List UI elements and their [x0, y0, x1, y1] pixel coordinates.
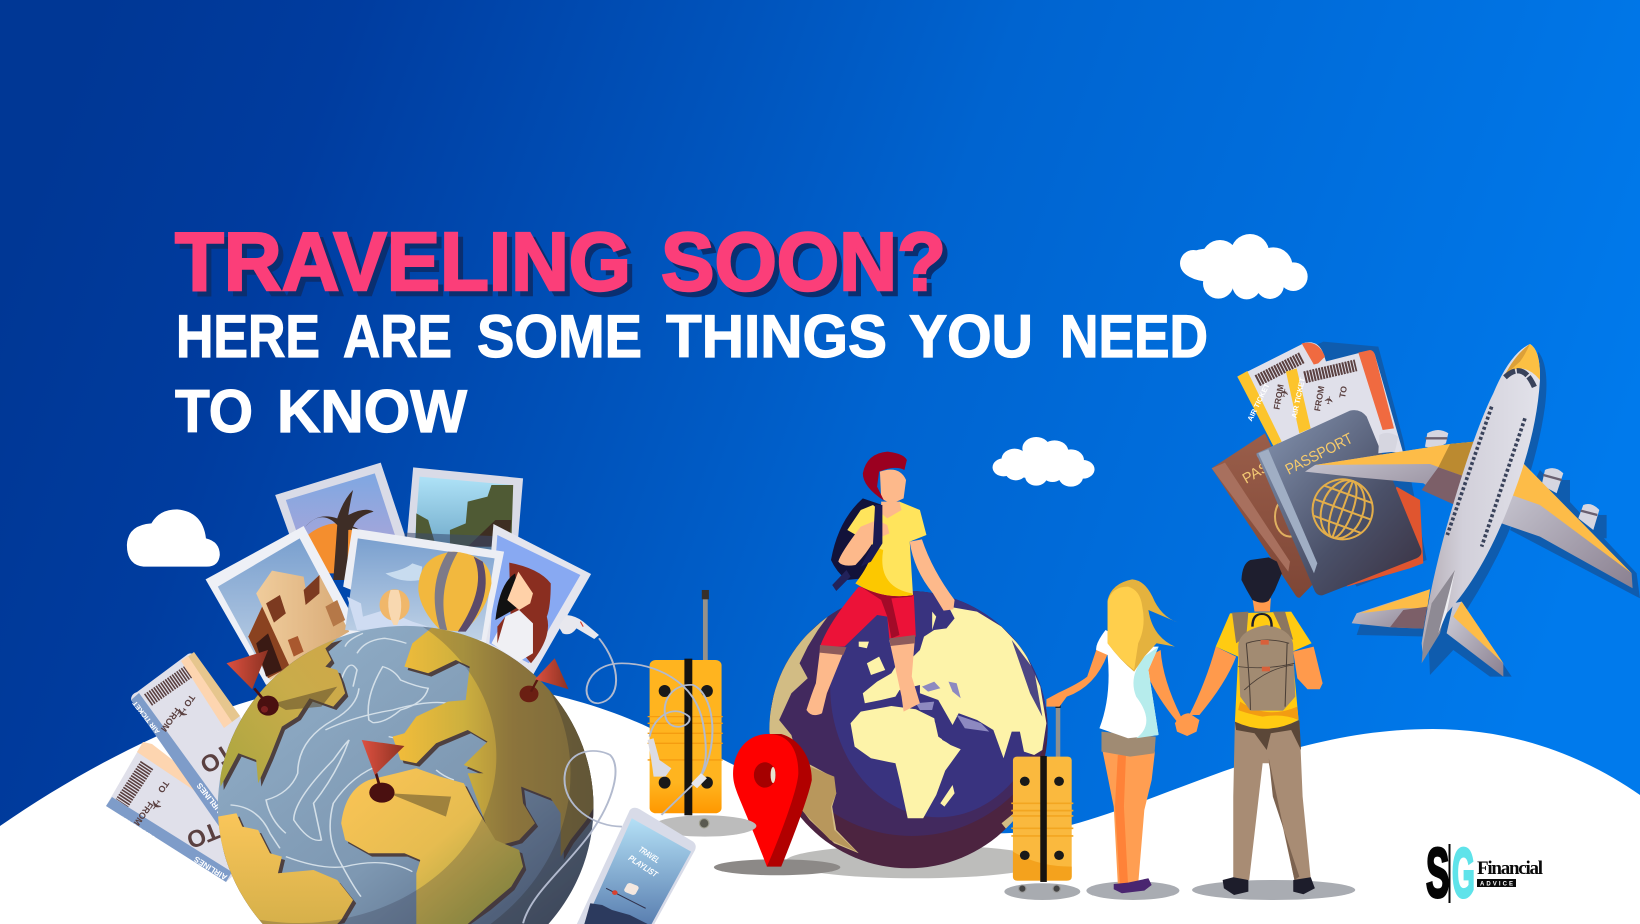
map flags	[227, 650, 569, 817]
continent: east	[393, 627, 593, 857]
ticket lower: TO	[182, 816, 223, 854]
ticket: right	[1286, 350, 1403, 453]
title: traveling soon: TRAVELING	[175, 215, 631, 308]
earphones and cable	[523, 615, 712, 923]
illustration: passports and tickets	[1212, 342, 1427, 598]
continent: south west	[218, 813, 353, 924]
logo letter G: G	[1452, 834, 1475, 913]
engines	[1378, 430, 1599, 530]
logo tag: ADVICE	[1480, 882, 1513, 888]
ocean currents	[230, 633, 454, 897]
ticket upper: TO	[182, 693, 197, 709]
continent: centre	[341, 768, 523, 924]
ticket shadows	[1247, 342, 1427, 587]
ticket: left: FROM	[1271, 383, 1286, 410]
ticket lower: ✈	[146, 795, 166, 814]
photo: building	[206, 526, 361, 685]
flag east	[520, 658, 569, 702]
man with backpack	[1175, 557, 1355, 900]
ticket upper: FROM	[159, 706, 182, 733]
subtitle: KNOW	[277, 378, 467, 445]
photo: forest	[404, 467, 523, 550]
ticket: left: AIR TICKET	[1245, 381, 1272, 423]
tan land on the left	[768, 613, 859, 853]
boarding tickets	[106, 652, 300, 882]
subtitle: SOME	[477, 303, 642, 370]
smartphone: TRAVEL	[636, 845, 663, 865]
photo: balloons	[343, 528, 504, 643]
subtitle: NEED	[1060, 303, 1208, 370]
continent: north west	[220, 637, 345, 787]
ticket: left	[1237, 342, 1350, 447]
illustration: photos, tickets and globe	[100, 463, 712, 924]
ticket upper	[131, 652, 300, 850]
logo: SG Financial Advice	[1426, 834, 1543, 913]
title: traveling soon: TRAVELING	[180, 220, 636, 313]
subtitle: ARE	[343, 303, 452, 370]
subtitle: TO	[175, 378, 253, 445]
flag west	[227, 650, 337, 716]
cloud middle	[993, 437, 1095, 487]
ticket upper: AIR TICKET	[132, 699, 162, 735]
photo: palm	[275, 463, 406, 580]
smartphone	[577, 808, 696, 924]
right tail	[1447, 602, 1503, 677]
plane shadow	[1357, 352, 1640, 677]
title: traveling soon: SOON?	[666, 220, 951, 313]
woman	[1046, 579, 1181, 900]
passport: blue	[1257, 410, 1421, 595]
globe shading	[259, 626, 594, 924]
photo: woman	[484, 524, 591, 675]
suitcase large	[648, 590, 756, 837]
ticket: right: AIR TICKET	[1290, 376, 1307, 419]
globe	[769, 591, 1048, 868]
ground shadow: globe	[785, 845, 1046, 878]
passport: brown	[1212, 433, 1330, 598]
title: traveling soon	[175, 215, 951, 313]
subtitle: THINGS	[666, 303, 887, 370]
ticket upper: TO	[195, 738, 237, 779]
logo wordmark: Financial	[1477, 858, 1543, 879]
subtitle	[175, 303, 1208, 445]
ticket: right: TO	[1337, 385, 1349, 399]
left wing	[1305, 442, 1475, 507]
ticket lower: AIR TICKET	[118, 814, 156, 841]
logo letter S: S	[1426, 834, 1449, 912]
location pin	[733, 734, 812, 867]
inland water	[916, 682, 989, 732]
continent: asia and europe	[863, 607, 1046, 758]
traveller boy	[806, 452, 955, 715]
ticket lower	[106, 742, 285, 882]
fuselage	[1422, 344, 1540, 663]
land shadows	[221, 631, 597, 924]
right wing	[1497, 458, 1633, 588]
title: traveling soon: SOON?	[661, 215, 946, 308]
ticket: left: ✈	[1279, 387, 1292, 399]
ticket lower: AIRLINES	[192, 854, 229, 882]
cloud top right	[1180, 234, 1308, 299]
passport: blue: PASSPORT	[1283, 430, 1356, 479]
small islands	[859, 612, 955, 807]
subtitle: HERE	[176, 303, 320, 370]
subtitle: YOU	[909, 303, 1033, 370]
left globe	[218, 626, 594, 924]
left tail	[1352, 589, 1430, 629]
ticket: right: ✈	[1323, 395, 1337, 406]
ticket upper: AIRLINES	[195, 781, 225, 816]
illustration: globe with traveller	[714, 452, 1355, 900]
passport: brown: PAS	[1240, 459, 1273, 487]
ground shadow: pin	[714, 859, 840, 875]
cloud left	[127, 509, 220, 567]
ticket upper: ✈	[172, 703, 192, 722]
white hill	[0, 678, 1640, 924]
suitcase small	[1004, 700, 1080, 900]
smartphone: PLAYLIST	[626, 854, 661, 879]
ticket: right: FROM	[1312, 385, 1326, 412]
continent: africa	[851, 706, 961, 818]
ticket lower: FROM	[132, 800, 155, 827]
flag centre	[362, 740, 451, 817]
illustration: airplane	[1305, 344, 1640, 677]
passport peek ticket	[1347, 487, 1423, 587]
ticket lower: TO	[156, 779, 171, 795]
